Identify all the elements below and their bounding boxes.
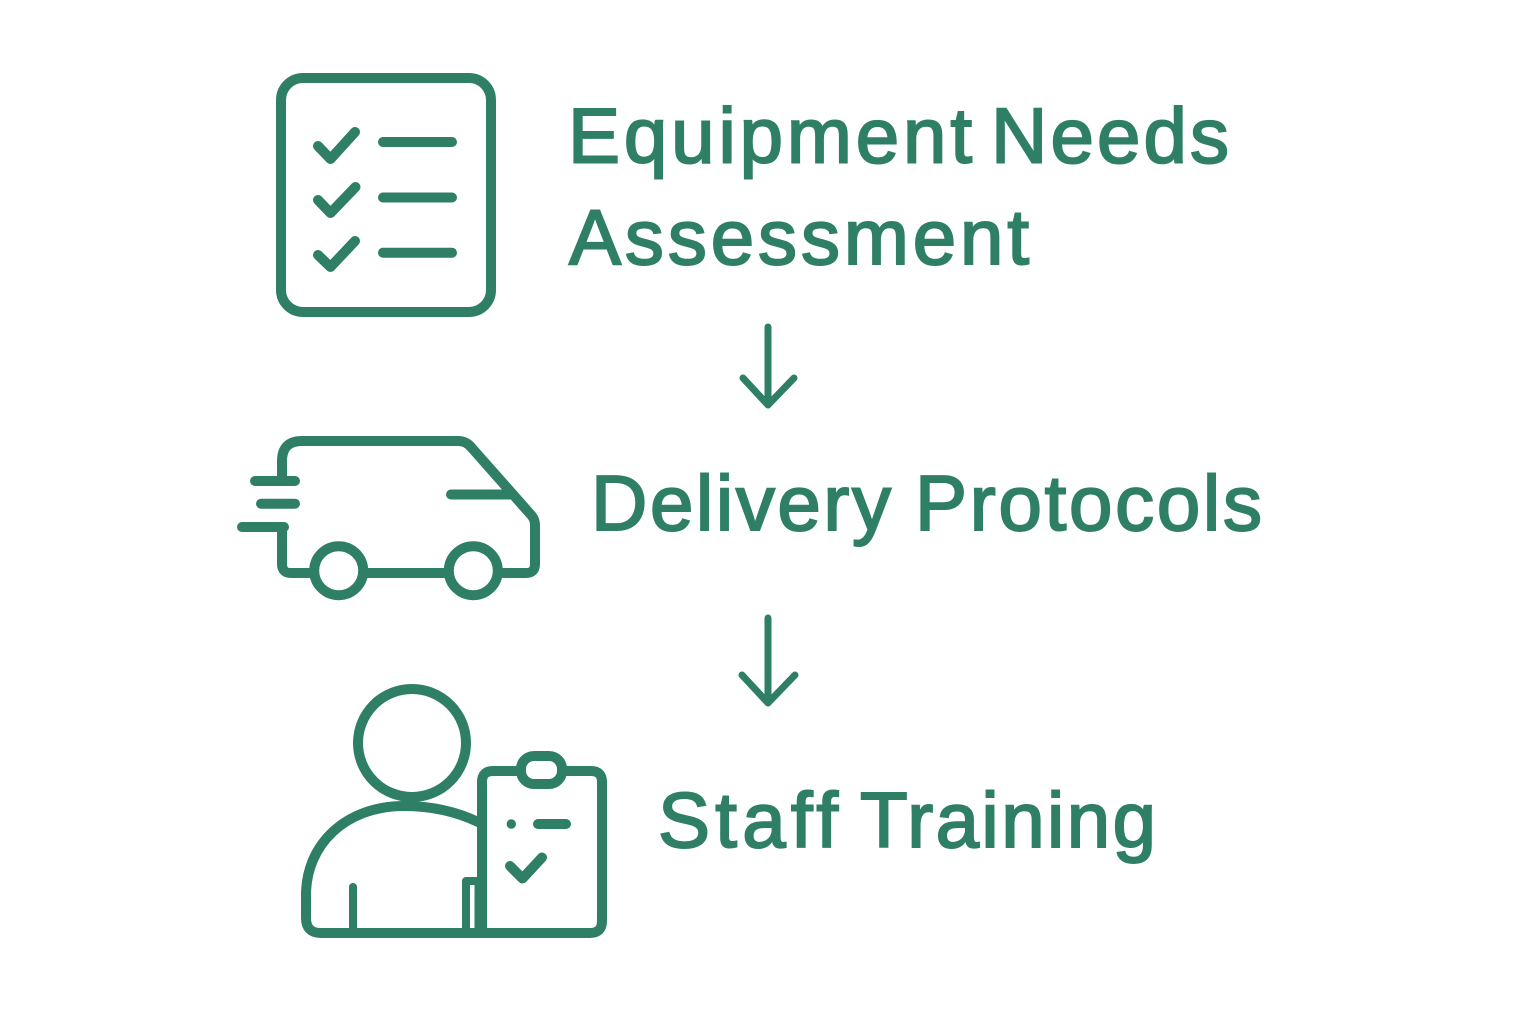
heading: Delivery Protocols: Protocols — [915, 459, 1262, 547]
icon: delivery van — [242, 441, 535, 595]
heading: Equipment Needs Assessment: Assessment — [569, 193, 1029, 281]
heading: Equipment Needs Assessment: Needs — [991, 92, 1229, 180]
heading: Delivery Protocols — [591, 459, 1262, 547]
heading: Equipment Needs Assessment: Equipment — [568, 92, 972, 180]
arrow: down 2 — [742, 618, 795, 703]
heading: Equipment Needs Assessment — [568, 92, 1229, 281]
heading: Staff Training — [658, 776, 1156, 864]
heading: Staff Training: Staff — [658, 776, 838, 864]
icon: checklist — [281, 78, 491, 312]
arrow: down 1 — [743, 327, 794, 405]
heading: Delivery Protocols: Delivery — [591, 459, 891, 547]
heading: Staff Training: Training — [860, 776, 1156, 864]
icon: staff with clipboard — [306, 689, 602, 933]
